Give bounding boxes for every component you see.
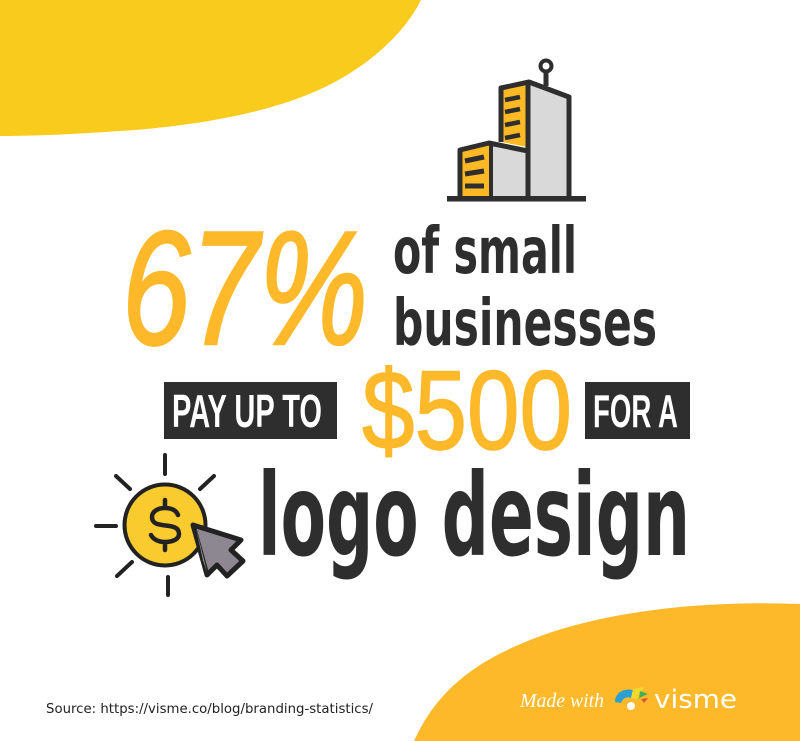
bottom-right orange blob (414, 603, 800, 741)
icon: dollar coin with cursor (96, 455, 243, 595)
icon: cursor (193, 525, 243, 576)
icon: visme logo (615, 687, 648, 710)
icon: office buildings (447, 60, 586, 202)
label: for a: FOR A (593, 385, 678, 437)
text: visme: visme (654, 685, 737, 715)
source citation: Source: https://visme.co/blog/branding-statistics/ (46, 702, 374, 717)
label: for a (585, 382, 690, 439)
icon: coin (124, 484, 206, 566)
text: businesses: businesses (393, 287, 657, 361)
statistic: $500: $500 (362, 348, 572, 473)
statistic: 67%: 67% (122, 198, 368, 379)
badge: made with visme (519, 685, 737, 715)
top-left yellow blob (0, 0, 421, 136)
label: pay up to: PAY UP TO (172, 385, 322, 437)
text: of small: of small (393, 215, 577, 289)
label: pay up to (164, 382, 337, 439)
icon: rays (96, 455, 214, 595)
text: made with: Made with (519, 690, 604, 712)
